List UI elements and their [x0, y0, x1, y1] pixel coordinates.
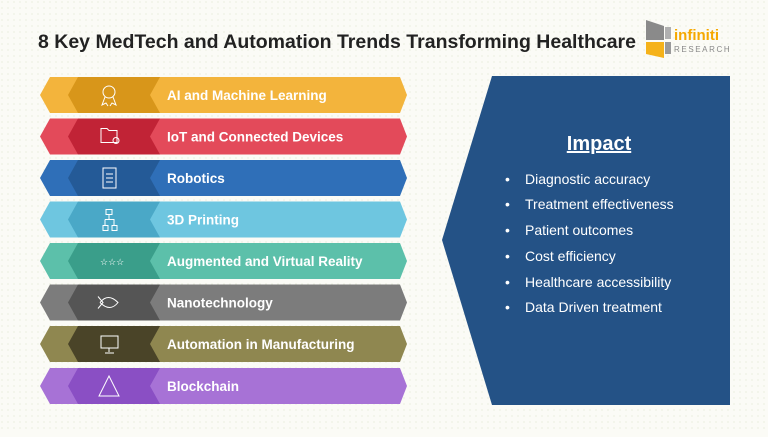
impact list: • — [505, 248, 510, 264]
impact list: Healthcare accessibility — [525, 274, 671, 290]
bar: Blockchain: Blockchain — [167, 379, 239, 394]
logo: RESEARCH — [674, 45, 731, 54]
bar: IoT: IoT and Connected Devices — [167, 130, 343, 144]
impact list: Diagnostic accuracy — [525, 171, 650, 187]
bar: Automation in Manufacturing — [40, 326, 407, 362]
bar: AR/VR — [40, 243, 407, 279]
bar: Robotics — [40, 160, 407, 196]
bar: Blockchain — [40, 368, 407, 404]
logo — [646, 20, 731, 58]
impact list: Cost efficiency — [525, 248, 616, 264]
bar: Robotics: Robotics — [167, 171, 225, 186]
bar: 3D Printing: 3D Printing — [167, 212, 239, 228]
bar: AR/VR: Augmented and Virtual Reality — [167, 254, 363, 269]
impact list: Patient outcomes — [525, 222, 633, 238]
title: 8 Key MedTech and Automation Trends Transforming Healthcare — [38, 32, 636, 53]
impact list: • — [505, 222, 510, 238]
logo: infiniti — [674, 27, 719, 44]
bar: AI and Machine Learning: AI and Machine Learning — [167, 88, 327, 103]
impact list: Treatment effectiveness — [525, 196, 674, 212]
impact list: Data Driven treatment — [525, 299, 662, 315]
bar: Nanotechnology: Nanotechnology — [167, 296, 273, 310]
trend bars — [40, 77, 407, 404]
bar: IoT — [40, 118, 407, 154]
bar: AI and Machine Learning — [40, 77, 407, 113]
impact list: • — [505, 171, 510, 187]
impact list — [505, 171, 674, 315]
impact list: • — [505, 299, 510, 315]
impact list: • — [505, 274, 510, 290]
bar: Nanotechnology — [40, 284, 407, 320]
panel: impact — [442, 76, 730, 405]
bar: Automation in Manufacturing: Automation in Manufacturing — [167, 337, 354, 352]
impact list: • — [505, 196, 510, 212]
bar: 3D Printing — [40, 202, 407, 238]
bar: AR/VR: ☆☆☆ — [100, 257, 124, 267]
heading: Impact: Impact — [567, 133, 632, 155]
